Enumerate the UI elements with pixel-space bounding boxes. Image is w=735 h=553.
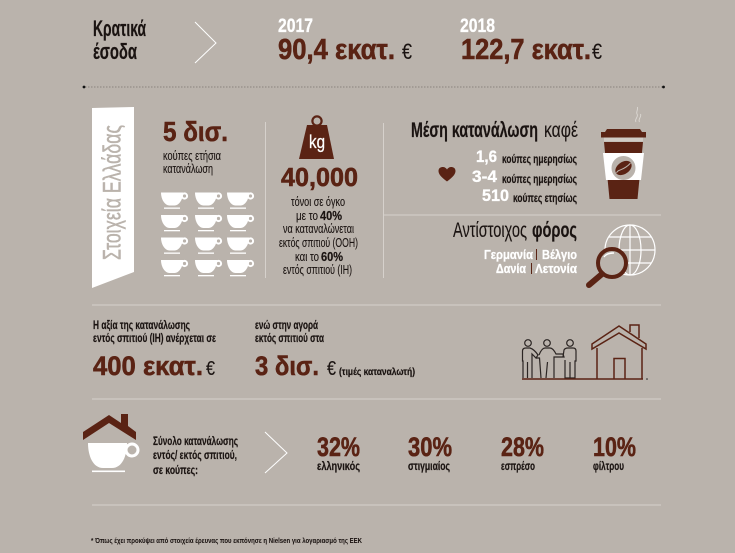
stats: cups per day and year: κούπες ημερησίως	[502, 154, 577, 166]
text: out-of-home value	[255, 318, 415, 381]
stat: 2017 revenue: 2017	[278, 16, 313, 37]
text: out-of-home value: ενώ στην αγορά	[255, 318, 318, 332]
arrow: revenue chevron	[195, 22, 216, 63]
text: total consumption label	[153, 434, 238, 477]
icon: house-roof cup	[83, 414, 138, 472]
panel: Greece data banner	[92, 107, 134, 288]
text: in-home value: εντός σπιτιού (ΙΗ) ανέρχεται σε	[93, 331, 216, 345]
text: tonnes description: και το	[295, 250, 319, 264]
arrow: consumption chevron	[265, 432, 287, 473]
text: in-home value: Η αξία της κατανάλωσης	[93, 318, 190, 332]
text: tonnes description: με το	[296, 209, 318, 223]
text: out-of-home value: (τιμές καταναλωτή)	[339, 367, 415, 378]
stat: 10% filter: 10%	[593, 432, 636, 462]
stat: 2018 revenue: €	[592, 39, 602, 64]
heading: state revenue: Κρατικά	[93, 16, 146, 41]
text: countries list: Δανία	[496, 261, 526, 276]
stat: 28% espresso: εσπρέσο	[501, 459, 535, 473]
stats: cups per day and year: 1,6	[476, 147, 497, 166]
stat: 2017 revenue: 90,4 εκατ.	[278, 34, 395, 66]
text: countries list	[484, 247, 577, 276]
stats: cups per day and year: κούπες ετησίως	[513, 193, 577, 205]
stat: 10% filter	[593, 432, 636, 473]
icon: takeaway coffee cup	[601, 107, 646, 199]
icon: grid of cups	[161, 192, 253, 276]
stat: 32% Greek: ελληνικός	[317, 459, 360, 473]
stat: 5 billion cups: 5 δισ.	[163, 116, 228, 147]
stat: 28% espresso: 28%	[501, 432, 544, 462]
text: tonnes description: τόνοι σε όγκο	[291, 195, 345, 209]
text: tonnes description	[279, 195, 358, 277]
icon: globe and magnifier	[589, 225, 655, 285]
stat: 28% espresso	[501, 432, 544, 473]
text: tonnes description: 60%	[321, 250, 343, 264]
text: tonnes description: εκτός σπιτιού (ΟΟΗ)	[279, 236, 358, 250]
stat: 5 billion cups	[163, 116, 228, 176]
icon: kg weight	[299, 116, 334, 159]
icon: heart	[438, 167, 456, 182]
stats: cups per day and year	[472, 147, 577, 205]
heading: corresponding tax: φόρος	[532, 219, 577, 242]
panel: Greece data banner: Στοιχεία Ελλάδας	[98, 125, 126, 260]
text: countries list: Βέλγιο	[542, 247, 577, 262]
stat: 30% instant: στιγμιαίος	[408, 459, 450, 473]
text: out-of-home value: 3 δισ.	[255, 351, 319, 381]
text: tonnes description: να καταναλώνεται	[283, 222, 354, 236]
stats: cups per day and year: 3-4	[472, 167, 498, 186]
stat: 2017 revenue	[278, 16, 412, 66]
heading: state revenue	[93, 16, 146, 64]
icon: people and house	[522, 325, 648, 380]
text: countries list: Γερμανία	[484, 247, 533, 262]
text: out-of-home value: €	[327, 358, 336, 380]
stats: cups per day and year: κούπες ημερησίως	[502, 174, 577, 186]
heading: state revenue: έσοδα	[93, 39, 137, 64]
stat: 32% Greek: 32%	[317, 432, 360, 462]
text: tonnes description: 40%	[320, 209, 342, 223]
stat: 30% instant: 30%	[408, 432, 452, 462]
text: in-home value	[93, 318, 216, 381]
text: in-home value: €	[206, 358, 215, 380]
icon: kg weight: kg	[309, 132, 325, 152]
stat: 10% filter: φίλτρου	[593, 459, 624, 473]
text: out-of-home value: εκτός σπιτιού στα	[255, 331, 324, 345]
footnote: * Όπως έχει προκύψει από στοιχεία έρευνας που εκπόνησε η Nielsen για λογαριασμό της ΕΕΚ	[91, 536, 362, 545]
heading: average coffee consumption: Μέση κατανάλωση	[411, 119, 538, 142]
stat: 2018 revenue: 2018	[460, 16, 495, 37]
heading: corresponding tax: Αντίστοιχος	[453, 219, 527, 242]
stat: 40,000 tonnes: 40,000	[281, 162, 358, 192]
text: total consumption label: Σύνολο κατανάλωσης	[153, 434, 238, 448]
stats: cups per day and year: 510	[482, 186, 509, 205]
stat: 2017 revenue: €	[402, 39, 412, 64]
text: total consumption label: σε κούπες:	[153, 463, 198, 477]
heading: average coffee consumption: καφέ	[544, 119, 578, 142]
stat: 2018 revenue: 122,7 εκατ.	[461, 34, 591, 66]
stat: 32% Greek	[317, 432, 360, 473]
text: countries list: Λετονία	[535, 261, 577, 276]
stat: 30% instant	[408, 432, 452, 473]
text: total consumption label: εντός/ εκτός σπιτιού,	[153, 448, 237, 462]
stat: 2018 revenue	[460, 16, 602, 66]
stat: 5 billion cups: κούπες ετήσια	[163, 149, 221, 163]
text: tonnes description: εντός σπιτιού (ΙΗ)	[283, 263, 352, 277]
text: in-home value: 400 εκατ.	[93, 351, 203, 381]
stat: 5 billion cups: κατανάλωση	[163, 162, 213, 176]
